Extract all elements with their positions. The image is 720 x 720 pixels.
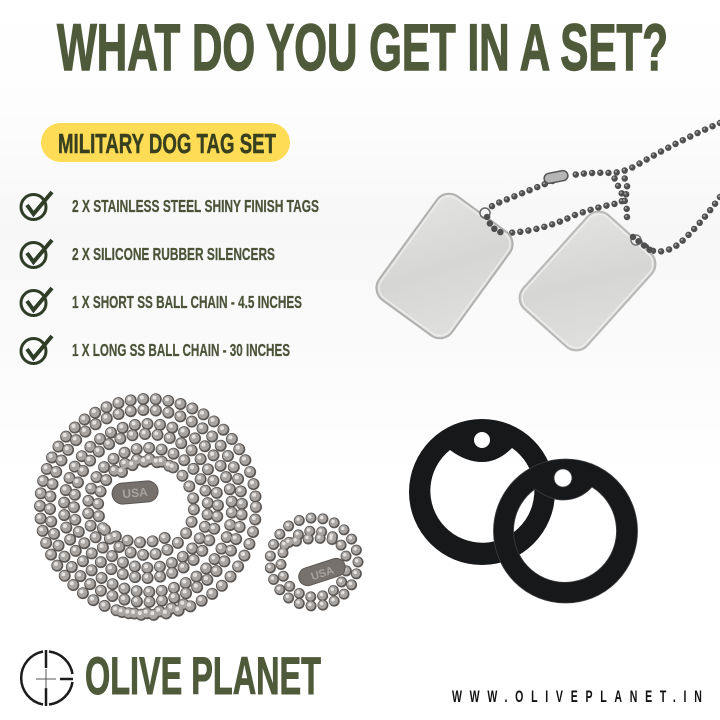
dog tags on chains (370, 122, 720, 357)
small clasp (543, 170, 569, 184)
item: silicone silencers: 2 X SILICONE RUBBER SILENCERS (72, 244, 275, 264)
item: stainless steel tags: 2 X STAINLESS STEEL SHINY FINISH TAGS (72, 196, 319, 216)
item: long chain: 1 X LONG SS BALL CHAIN - 30 INCHES (72, 340, 290, 360)
item: short chain: 1 X SHORT SS BALL CHAIN - 4.5 INCHES (72, 292, 302, 312)
item: stainless steel tags (21, 192, 319, 220)
right silencer (494, 459, 638, 603)
heading pill: military dog tag set: MILITARY DOG TAG SET (58, 128, 276, 159)
item: long chain (21, 336, 290, 364)
tag holes and chain overlap (480, 208, 650, 250)
checklist (21, 192, 319, 364)
clasp: USA (310, 565, 336, 583)
left silencer (409, 419, 555, 565)
chains (485, 122, 720, 251)
short ball chain (269, 517, 358, 606)
item: silicone silencers (21, 240, 275, 268)
website url: WWW.OLIVEPLANET.IN (452, 686, 702, 706)
left tag (370, 188, 519, 344)
long ball chain (39, 396, 256, 615)
clasp (111, 480, 159, 505)
logo: olive planet (21, 647, 321, 706)
heading pill: military dog tag set (41, 123, 290, 162)
clasp: USA (122, 485, 149, 501)
right tag (513, 205, 662, 357)
logo: olive planet: OLIVE PLANET (85, 647, 321, 706)
icon: crosshair (21, 650, 73, 706)
silicone silencers (409, 419, 638, 603)
item: short chain (21, 288, 302, 316)
